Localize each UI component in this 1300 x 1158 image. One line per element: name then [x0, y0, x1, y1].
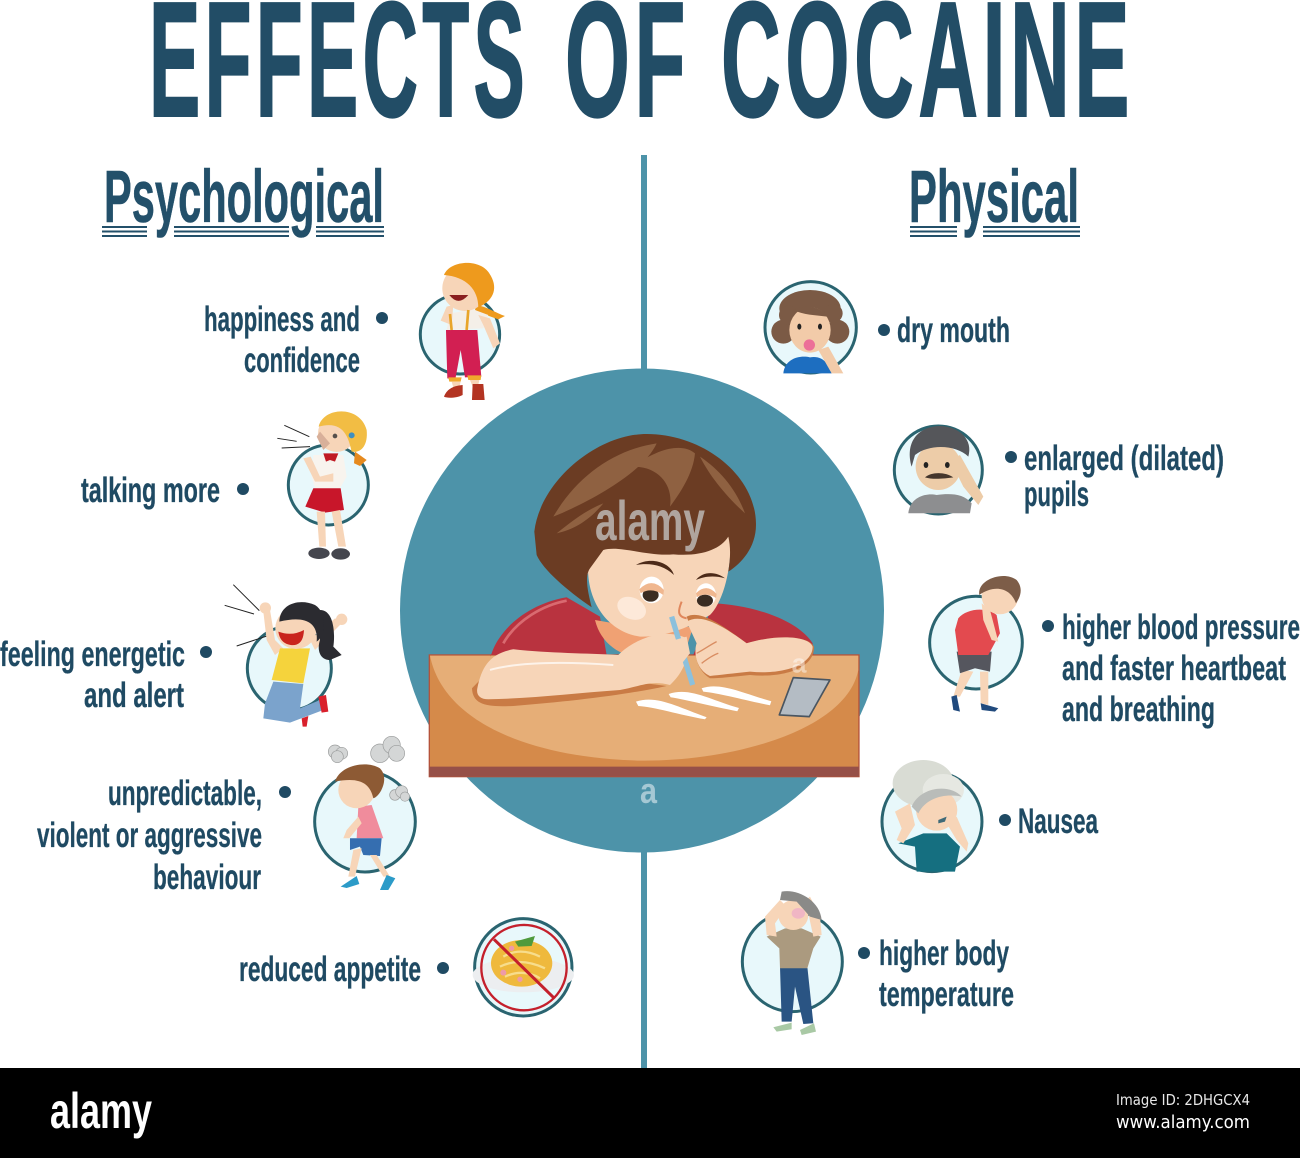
- text: happiness and confidence: [204, 300, 388, 380]
- text: higher body temperature: [858, 934, 1014, 1014]
- panel: physical effects: [742, 155, 1300, 1035]
- text: unpredictable, violent or aggressive behaviour: [37, 774, 291, 897]
- text: unpredictable, violent or aggressive behaviour: violent or aggressive: [37, 816, 262, 855]
- text: talking more: talking more: [81, 471, 220, 510]
- text: feeling energetic and alert: and alert: [84, 676, 184, 715]
- heading: Psychological: Psychological: [104, 155, 384, 238]
- text: higher blood pressure and faster heartbeat and breathing: [1042, 608, 1300, 729]
- icon: boy with racing heart: [930, 576, 1022, 712]
- icon: angry boy with steam: [315, 736, 415, 890]
- left arm shadow: [472, 680, 667, 706]
- head: [588, 537, 731, 637]
- footer bar: alamy credit: alamy: [50, 1083, 152, 1139]
- text: higher body temperature: temperature: [879, 975, 1014, 1014]
- text: higher blood pressure and faster heartbeat and breathing: and breathing: [1062, 690, 1215, 729]
- icon: talking girl in red skirt: [277, 411, 368, 560]
- icon: happy girl in overalls: [420, 263, 505, 400]
- powder lines: [636, 686, 771, 719]
- text: dry mouth: dry mouth: [897, 311, 1010, 350]
- phone mirror: [779, 678, 830, 717]
- right arm and hand: [687, 615, 814, 678]
- left arm and hand: [477, 634, 688, 699]
- footer bar: alamy credit: Image ID: 2DHGCX4: [1116, 1091, 1250, 1109]
- watermark: a on circle: a: [640, 770, 658, 811]
- text: dry mouth: [878, 311, 1010, 350]
- icon: woman with dry mouth: [765, 282, 856, 373]
- text: enlarged (dilated) pupils: pupils: [1024, 475, 1089, 514]
- text: Nausea: [999, 802, 1098, 841]
- heading: Physical: [909, 155, 1080, 238]
- text: higher body temperature: higher body: [879, 934, 1009, 973]
- panel: psychological effects: [0, 155, 574, 1016]
- center divider line: [641, 155, 647, 1068]
- straw: [672, 617, 693, 685]
- shirt: [491, 597, 813, 657]
- hair: [534, 434, 756, 607]
- heading: Physical: Physical: [909, 155, 1079, 238]
- text: happiness and confidence: confidence: [244, 341, 360, 380]
- icon: man with high temperature: [742, 891, 842, 1035]
- text: reduced appetite: reduced appetite: [239, 950, 421, 989]
- text: Nausea: Nausea: [1018, 802, 1098, 841]
- text: happiness and confidence: happiness and: [204, 300, 360, 339]
- text: unpredictable, violent or aggressive behaviour: unpredictable,: [108, 774, 262, 813]
- text: feeling energetic and alert: [0, 635, 212, 715]
- icon: man with dilated pupils: [894, 426, 983, 514]
- icon: jumping energetic girl: [225, 585, 347, 727]
- central illustration circle: [400, 368, 884, 852]
- text: feeling energetic and alert: feeling energetic: [0, 635, 185, 674]
- watermark: alamy on hair: alamy: [595, 489, 705, 552]
- text: enlarged (dilated) pupils: [1005, 439, 1224, 514]
- heading: Psychological: [102, 155, 384, 238]
- watermark small a marks: a: [792, 649, 807, 679]
- icon: old man with nausea: [882, 760, 982, 872]
- neck shade: [595, 620, 693, 655]
- table: [429, 655, 859, 777]
- footer bar: alamy credit: www.alamy.com: [1116, 1112, 1250, 1133]
- footer bar: alamy credit: [0, 1068, 1300, 1158]
- text: unpredictable, violent or aggressive behaviour: behaviour: [153, 858, 261, 897]
- central illustration: boy snorting at table: [429, 434, 859, 777]
- icon: crossed-out plate of food: [473, 919, 574, 1016]
- eyebrows and eyes: [636, 561, 725, 580]
